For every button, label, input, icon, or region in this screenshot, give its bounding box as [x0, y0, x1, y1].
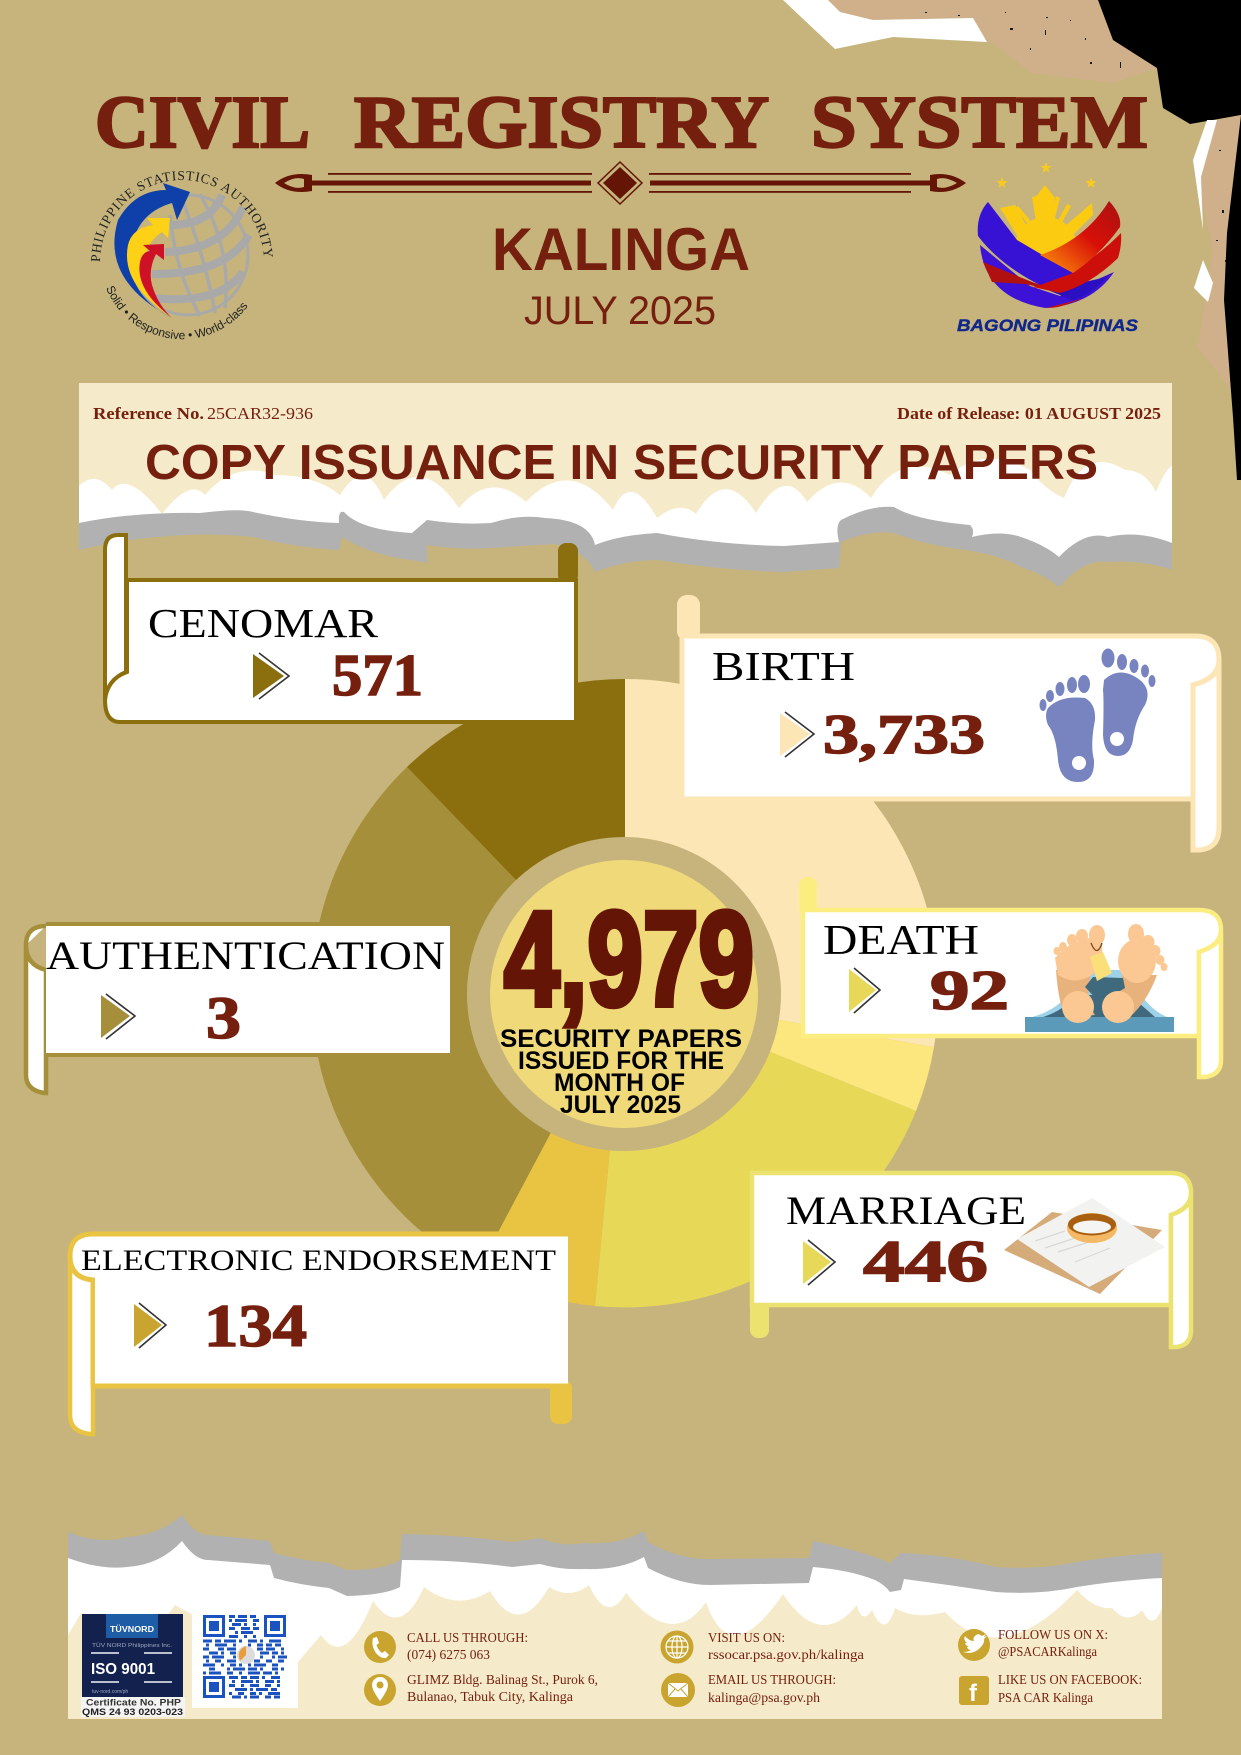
panel: CENOMAR [105, 535, 578, 722]
ISO 9001 certificate badge: Certificate No. PHP [86, 1698, 181, 1708]
arrow [803, 1240, 835, 1285]
panel: AUTHENTICATION: 3 [206, 985, 241, 1051]
contact: address: Bulanao, Tabuk City, Kalinga [407, 1689, 573, 1704]
banner heading: COPY ISSUANCE IN SECURITY PAPERS [145, 436, 1098, 490]
ISO 9001 certificate badge: tuv-nord.com/ph [92, 1689, 128, 1695]
title [95, 82, 1148, 164]
ISO 9001 certificate badge: QMS 24 93 0203-023 [82, 1707, 183, 1717]
panel: DEATH: DEATH [823, 918, 979, 964]
panel: DEATH: 92 [930, 960, 1009, 1022]
contact: X account: @PSACARKalinga [998, 1644, 1097, 1659]
contact: website: VISIT US ON: [708, 1630, 785, 1645]
logo: Bagong Pilipinas [957, 162, 1139, 335]
panel: AUTHENTICATION [26, 924, 450, 1093]
arrow [134, 1303, 166, 1348]
total caption: MONTH OF [554, 1069, 685, 1097]
panel: footer paper [68, 1515, 1162, 1719]
pie chart [311, 679, 939, 1307]
panel: DEATH [799, 877, 1221, 1077]
contact: facebook: PSA CAR Kalinga [998, 1690, 1093, 1705]
panel: BIRTH [677, 595, 1219, 850]
logo: Philippine Statistics Authority [91, 171, 273, 340]
arrow [253, 653, 289, 699]
panel: AUTHENTICATION: AUTHENTICATION [46, 933, 445, 978]
panel: ELECTRONIC ENDORSEMENT: ELECTRONIC ENDORSEMENT [81, 1244, 556, 1277]
logo: Philippine Statistics Authority: Solid • Responsive • World-class [106, 286, 248, 340]
panel: MARRIAGE: 446 [863, 1228, 988, 1294]
contact: website: rssocar.psa.gov.ph/kalinga [708, 1647, 864, 1662]
contact: phone [407, 1630, 528, 1662]
total caption: ISSUED FOR THE [518, 1047, 724, 1075]
contact: address: GLIMZ Bldg. Balinag St., Purok 6, [407, 1672, 598, 1687]
total caption [500, 1025, 742, 1119]
QR code [192, 1614, 298, 1708]
icon: map pin [364, 1674, 396, 1706]
panel: MARRIAGE: MARRIAGE [786, 1188, 1026, 1233]
logo: Philippine Statistics Authority: PHILIPPINE STATISTICS AUTHORITY [91, 171, 273, 262]
icon: ring on documents [1004, 1198, 1165, 1294]
contact: email: kalinga@psa.gov.ph [708, 1690, 820, 1705]
contact: address [407, 1672, 598, 1704]
reference number: Reference No. [93, 404, 204, 423]
panel: BIRTH: 3,733 [823, 704, 985, 766]
title: CIVIL [95, 82, 310, 164]
reference number [93, 404, 313, 423]
panel: ELECTRONIC ENDORSEMENT: 134 [204, 1293, 307, 1359]
contact: X account [998, 1627, 1108, 1659]
contact: phone: CALL US THROUGH: [407, 1630, 528, 1645]
panel: CENOMAR: 571 [332, 642, 423, 708]
ISO 9001 certificate badge: ISO 9001 [91, 1661, 155, 1678]
total caption: JULY 2025 [560, 1091, 681, 1119]
icon: feet with toe tag [1025, 924, 1174, 1032]
total circle [467, 837, 781, 1151]
release date: Date of Release: 01 AUGUST 2025 [897, 404, 1161, 423]
torn paper corner top right [783, 0, 1241, 480]
arrow [101, 994, 135, 1039]
icon: mail [661, 1673, 695, 1707]
icon: facebook [959, 1676, 989, 1707]
icon: phone [364, 1631, 396, 1663]
contact: email [708, 1672, 836, 1705]
ornament divider [275, 162, 966, 204]
contact: facebook: LIKE US ON FACEBOOK: [998, 1672, 1142, 1687]
total number: 4,979 [504, 885, 754, 1034]
subtitle: month: JULY 2025 [524, 289, 716, 333]
contact: phone: (074) 6275 063 [407, 1647, 490, 1662]
title: REGISTRY [354, 82, 769, 164]
arrow [849, 968, 880, 1013]
panel: BIRTH: BIRTH [712, 643, 855, 689]
ISO 9001 certificate badge [81, 1614, 185, 1717]
logo: Bagong Pilipinas: BAGONG PILIPINAS [957, 316, 1139, 335]
panel: CENOMAR: CENOMAR [148, 600, 379, 646]
total caption: SECURITY PAPERS [500, 1025, 742, 1053]
reference number: 25CAR32-936 [207, 404, 313, 423]
arrow [780, 712, 814, 757]
ISO 9001 certificate badge: TÜVNORD [110, 1625, 154, 1634]
panel: header banner paper [79, 383, 1172, 605]
title: SYSTEM [811, 82, 1148, 164]
icon: twitter [958, 1629, 990, 1661]
panel: ELECTRONIC ENDORSEMENT [70, 1234, 572, 1434]
icon: globe [660, 1630, 694, 1664]
icon: facebook: f [969, 1680, 978, 1707]
panel: MARRIAGE [750, 1173, 1191, 1347]
contact: facebook [998, 1672, 1142, 1705]
icon: baby feet [1040, 648, 1156, 782]
contact: email: EMAIL US THROUGH: [708, 1672, 836, 1687]
ISO 9001 certificate badge: TÜV NORD Philippines Inc. [92, 1642, 173, 1649]
contact: X account: FOLLOW US ON X: [998, 1627, 1108, 1642]
subtitle: Kalinga: KALINGA [492, 216, 750, 283]
contact: website [708, 1630, 864, 1662]
